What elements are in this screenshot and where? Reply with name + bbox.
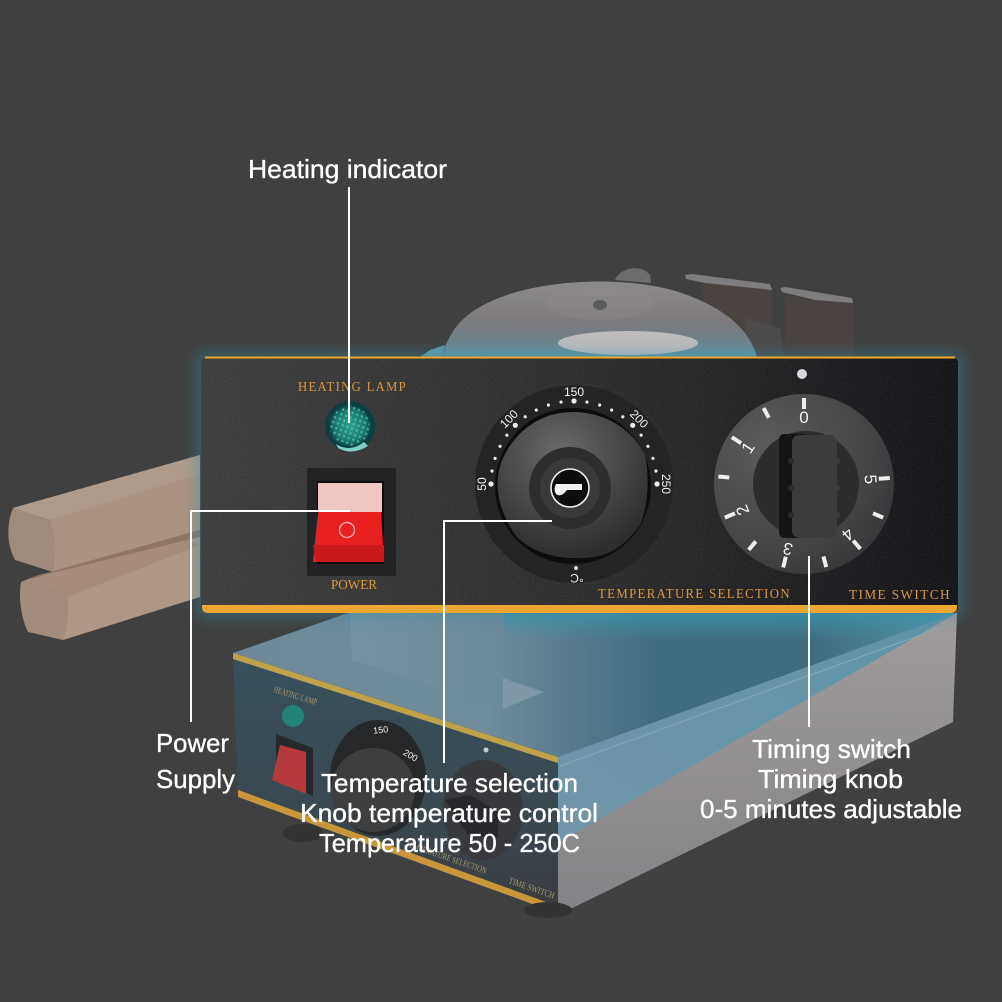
icon: power rocker switch [307,468,396,576]
icon: temperature dial: 200 [627,407,651,431]
icon: temperature dial: 100 [497,407,521,431]
panel: control panel [201,356,958,613]
icon: time switch dial: 5 [861,474,880,485]
panel: miniature front controls on base [272,684,556,901]
label: temperature selection: TEMPERATURE SELECTION [598,587,791,602]
callout: timing switch: Timing switch [752,734,911,764]
panel: miniature front controls on base: 150 [373,724,389,736]
callout: power supply [156,728,235,794]
icon: temperature dial: °C [570,571,584,585]
icon: time switch dial: 2 [732,502,753,518]
icon: power dot [797,369,807,379]
callout lines [191,187,809,763]
icon: green heating lamp [325,401,375,452]
callout: temperature selection: Temperature 50 - 250C [319,828,580,858]
tick marks [718,398,890,568]
icon: time switch dial: 4 [838,524,857,544]
label: heating lamp: HEATING LAMP [298,380,407,395]
icon: dome lid and hinge brackets [420,268,853,357]
icon: temperature dial: 150 [564,385,584,399]
callout: timing switch: Timing knob [758,764,903,794]
callout: power supply: Power [156,728,229,758]
callout: temperature selection: Knob temperature control [300,798,598,828]
panel: miniature front controls on base: HEATING LAMP [272,684,318,707]
panel: miniature front controls on base: TIME SWITCH [507,875,556,901]
icon: temperature dial: 250 [659,474,673,494]
icon: wooden handles [8,455,200,640]
icon: time switch dial: 3 [781,538,795,559]
label: power: POWER [331,578,378,593]
scale dots [488,398,660,487]
label: time switch: TIME SWITCH [849,588,951,603]
callout: temperature selection: Temperature selection [321,768,578,798]
icon: time switch dial: 1 [738,439,759,457]
callout: timing switch [700,734,962,824]
panel glow [196,352,963,618]
icon: temperature dial: 50 [475,477,489,491]
icon: time switch dial [714,394,894,574]
panel: miniature front controls on base: TEMPERATURE SELECTION [404,838,488,876]
callout: timing switch: 0-5 minutes adjustable [700,794,962,824]
callout: temperature selection [300,768,598,858]
icon: time switch dial: 0 [799,408,809,427]
callout: power supply: Supply [156,764,235,794]
callout: heating indicator: Heating indicator [248,154,447,184]
panel: stainless steel base [233,613,958,918]
panel: miniature front controls on base: 200 [401,747,420,763]
icon: temperature dial [475,385,673,585]
